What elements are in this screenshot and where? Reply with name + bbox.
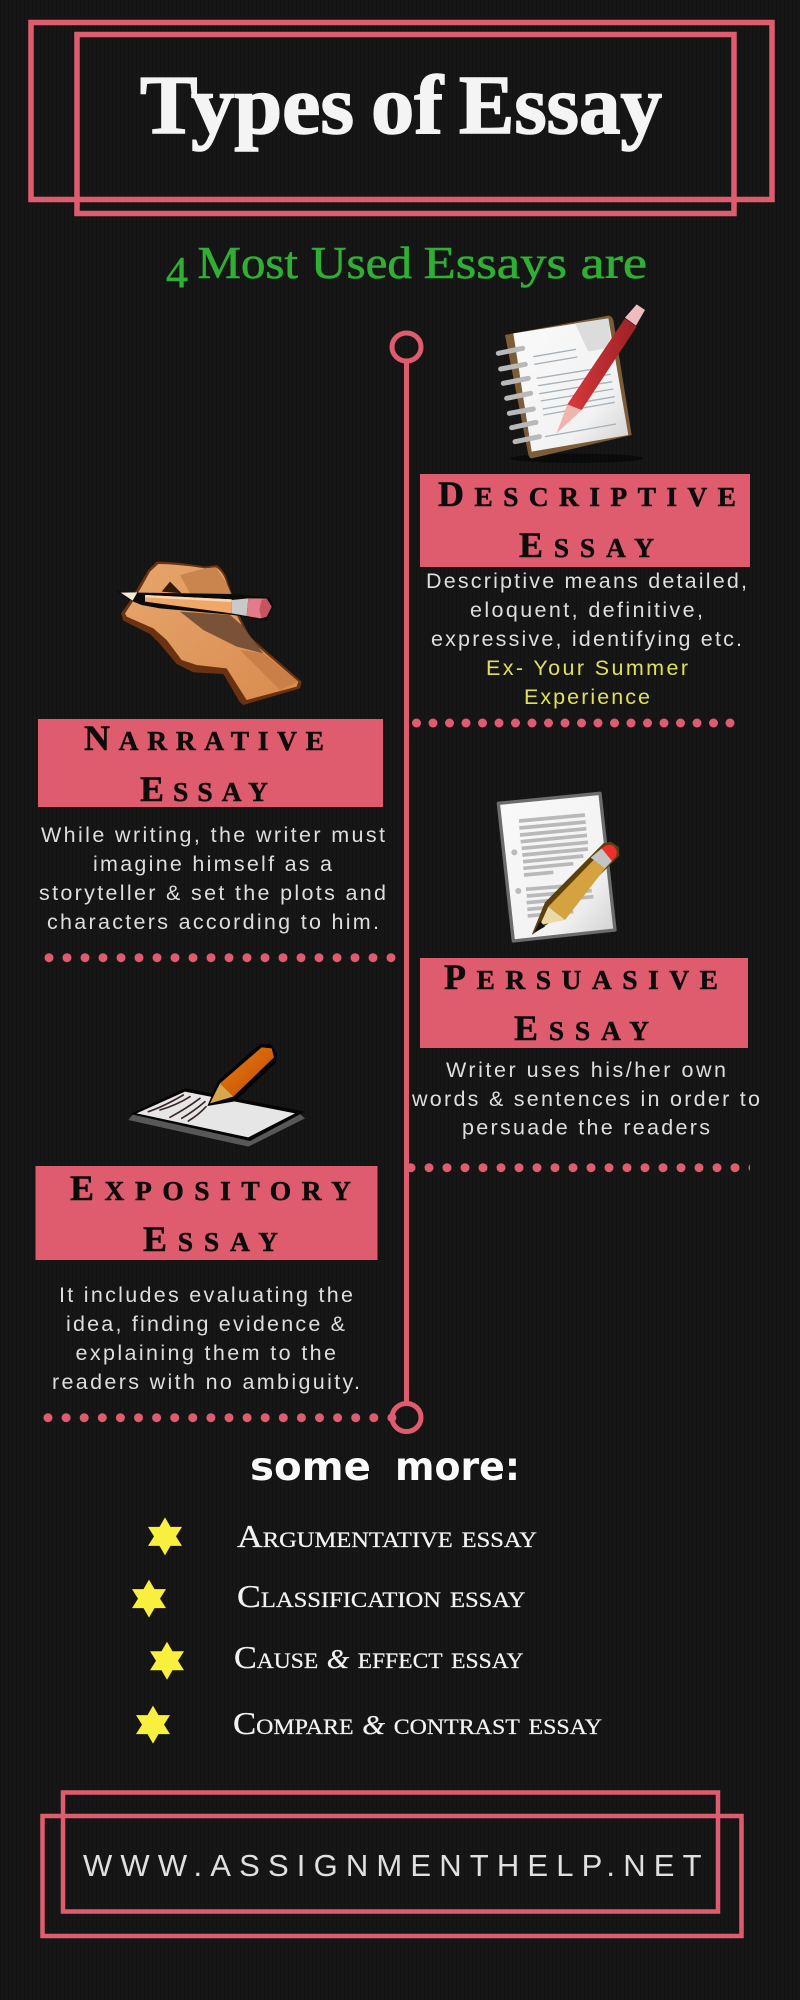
description (426, 569, 747, 709)
description: Descriptive means detailed, (426, 569, 747, 593)
subtitle: Essays (424, 237, 567, 288)
title: of (371, 59, 444, 152)
description: While writing, the writer must (41, 823, 385, 847)
heading text: N ARRATIVE (84, 718, 324, 758)
dotted divider: descriptive (412, 718, 734, 728)
description: Ex- Your Summer (486, 656, 688, 680)
panel: narrative essay: E SSAY (140, 769, 268, 809)
panel: expository essay (36, 1166, 378, 1394)
heading text: D ESCRIPTIVE (438, 474, 736, 514)
heading: some more: more: (395, 1445, 520, 1490)
heading band (36, 1166, 378, 1260)
timeline (392, 333, 421, 1432)
footer frame (42, 1792, 742, 1936)
description (411, 1058, 760, 1140)
description: expressive, identifying etc. (431, 627, 742, 651)
dotted divider: expository (44, 1413, 396, 1422)
item: cause and effect: Cause & effect essay (234, 1639, 524, 1675)
title: Essay (459, 59, 662, 152)
description: idea, finding evidence & (66, 1312, 345, 1336)
icon: star 4 (136, 1706, 170, 1744)
description (52, 1283, 360, 1394)
icon: hand holding pencil (117, 562, 302, 705)
description: persuade the readers (462, 1116, 710, 1140)
item: compare and contrast: Compare & contrast essay (233, 1705, 602, 1741)
heading band (420, 474, 750, 567)
icon: paper and orange pencil (128, 1044, 305, 1147)
panel: descriptive essay (420, 474, 750, 709)
icon: star 1 (148, 1517, 182, 1555)
title: Types (140, 59, 354, 152)
dotted divider: narrative (44, 953, 396, 962)
item: classification: Classification essay (237, 1578, 526, 1614)
panel: descriptive essay: E SSAY (519, 525, 654, 565)
item: argumentative: Argumentative essay (237, 1518, 537, 1554)
icon: star 2 (132, 1580, 166, 1618)
icon: document and gold pencil (498, 793, 619, 941)
title frame (31, 22, 772, 214)
description: explaining them to the (76, 1341, 336, 1365)
panel: narrative essay (38, 718, 386, 934)
subtitle: Used (311, 237, 412, 288)
dotted divider: persuasive (406, 1163, 758, 1172)
description (39, 823, 386, 934)
description: imagine himself as a (93, 852, 332, 876)
list: more essay types (132, 1517, 602, 1744)
panel: expository essay: E SSAY (143, 1219, 278, 1259)
footer url: WWW.ASSIGNMENTHELP.NET (83, 1848, 702, 1883)
subtitle: are (581, 237, 647, 288)
heading text: P ERSUASIVE (444, 957, 718, 997)
icon: notebook and pencil (498, 304, 645, 463)
description: eloquent, definitive, (470, 598, 703, 622)
description: storyteller & set the plots and (39, 881, 386, 905)
description: characters according to him. (47, 910, 379, 934)
heading text: E XPOSITORY (70, 1168, 351, 1208)
panel: persuasive essay (411, 957, 760, 1140)
description: readers with no ambiguity. (52, 1370, 360, 1394)
description: It includes evaluating the (59, 1283, 353, 1307)
subtitle: 4 (166, 248, 188, 297)
heading: some more: some (250, 1445, 371, 1490)
heading band (38, 719, 383, 807)
icon: star 3 (150, 1642, 184, 1680)
description: Experience (524, 685, 650, 709)
description: Writer uses his/her own (446, 1058, 726, 1082)
heading band (420, 958, 748, 1048)
panel: persuasive essay: E SSAY (514, 1008, 649, 1048)
description: words & sentences in order to (411, 1087, 760, 1111)
subtitle: Most (198, 237, 298, 288)
